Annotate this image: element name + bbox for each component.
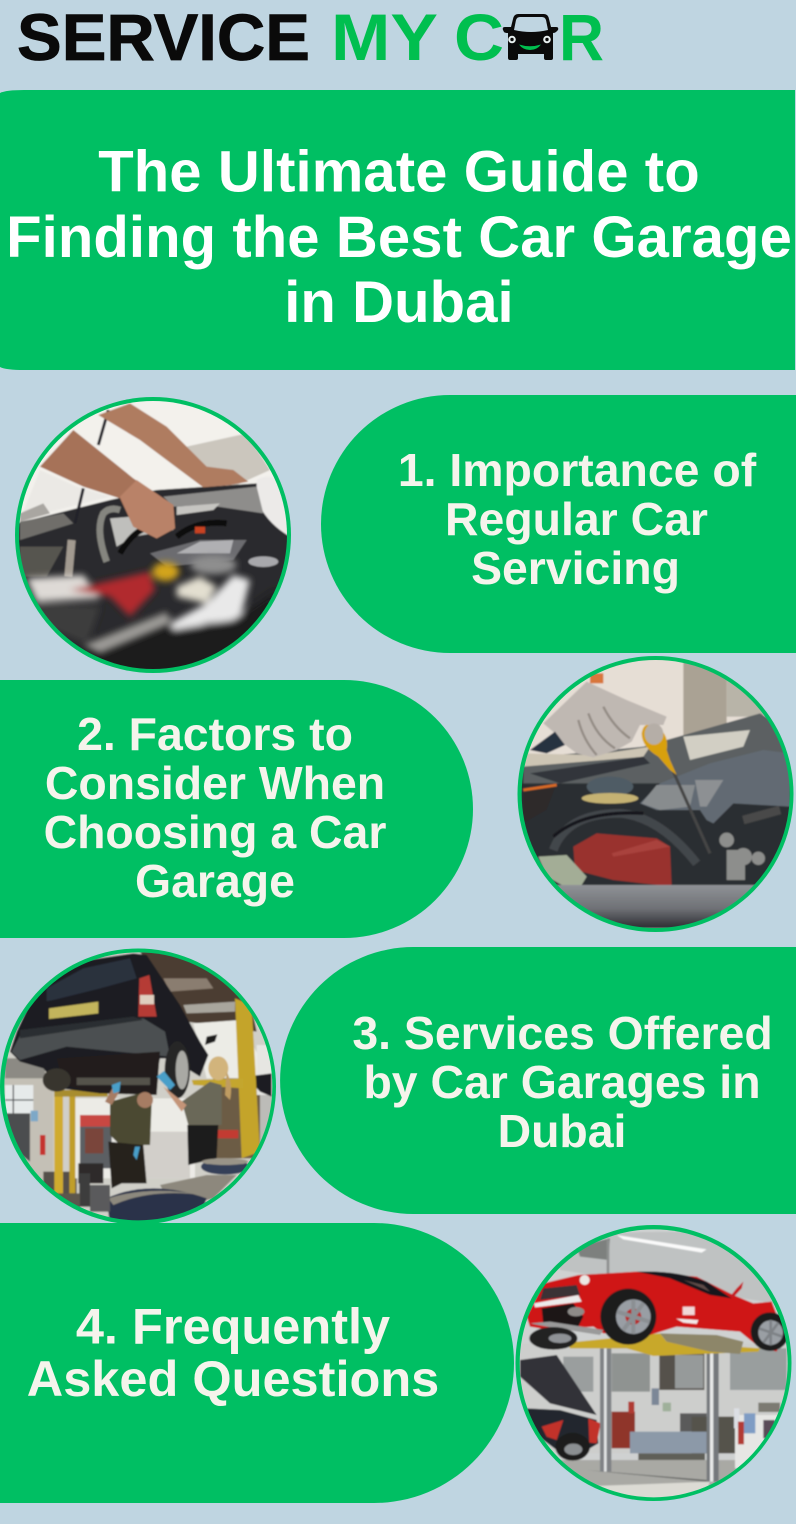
title text: Finding the Best Car Garage	[6, 205, 792, 270]
mechanic left	[105, 1082, 153, 1188]
tool chest	[630, 1432, 707, 1453]
engine cover	[640, 750, 790, 823]
back wall	[75, 1098, 195, 1178]
section 1 heading: 1. Importance of	[398, 444, 757, 496]
logo: Service My Car	[17, 0, 604, 74]
lift columns	[600, 1348, 611, 1472]
yellow posts	[235, 998, 260, 1158]
dark base	[522, 768, 790, 886]
arms	[40, 430, 175, 538]
icon: smiling car	[503, 14, 558, 60]
right shelves	[213, 1077, 261, 1160]
photo: mechanics under lifted car	[0, 945, 285, 1230]
logo: Service My Car: C	[454, 0, 504, 74]
photo: red sports car on lift	[510, 1220, 796, 1507]
section 4 heading: 4. Frequently	[76, 1298, 390, 1354]
title panel	[0, 90, 795, 370]
second red car with open hood	[520, 1355, 597, 1415]
section 2 heading: 2. Factors to	[77, 708, 353, 760]
panel: section 1	[321, 395, 796, 653]
section 3 heading: 3. Services Offered	[352, 1007, 773, 1059]
logo: Service My Car: SERVICE	[17, 0, 310, 74]
red car	[527, 1272, 784, 1352]
section 2 heading: Consider When	[45, 757, 385, 809]
section 1 heading: Servicing	[471, 542, 680, 594]
foreground blur	[27, 556, 277, 680]
section 2 heading: Choosing a Car	[44, 806, 386, 858]
panel: section 2	[0, 680, 473, 938]
dipstick	[673, 772, 710, 853]
lift platform	[568, 1333, 760, 1356]
title text: in Dubai	[284, 270, 514, 335]
panel: section 4	[0, 1223, 514, 1503]
logo: Service My Car: MY	[331, 0, 438, 74]
title text: The Ultimate Guide to	[98, 140, 700, 204]
engine bay	[19, 482, 287, 654]
left wall	[4, 1072, 54, 1181]
logo: Service My Car: R	[559, 0, 604, 74]
mechanic right	[157, 1056, 231, 1165]
section 3 heading: Dubai	[498, 1105, 626, 1157]
wheels	[529, 1327, 577, 1350]
floor	[560, 1459, 736, 1486]
section 1 heading: Regular Car	[445, 493, 708, 545]
section 2 heading: Garage	[135, 855, 295, 907]
glove	[530, 682, 667, 757]
panel: section 3	[280, 947, 796, 1214]
ceiling	[140, 952, 257, 1032]
section 4 heading: Asked Questions	[27, 1350, 439, 1407]
right cart	[735, 1415, 778, 1468]
red battery cover	[573, 833, 672, 887]
car body	[10, 953, 208, 1093]
underbody	[101, 1051, 160, 1096]
section 3 heading: by Car Garages in	[363, 1056, 761, 1108]
foreground equipment	[200, 1162, 248, 1176]
foreground	[556, 884, 755, 928]
back wall windows	[520, 1343, 787, 1453]
photo: mechanic hands over engine	[15, 397, 291, 673]
photo: gloved hand checking dipstick	[510, 650, 796, 940]
